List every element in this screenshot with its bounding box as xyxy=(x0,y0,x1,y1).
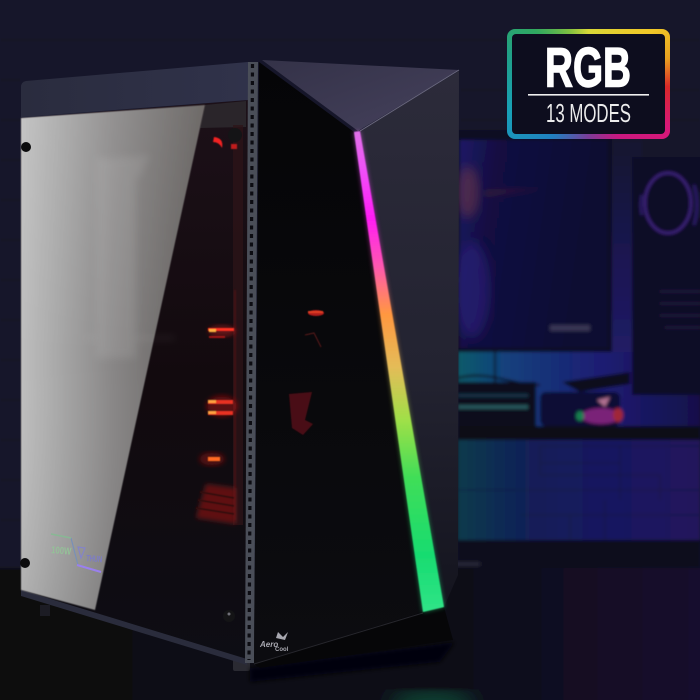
base wedge xyxy=(254,607,453,668)
perforated rack strip xyxy=(245,62,258,663)
badge inner panel xyxy=(512,34,665,134)
side panel interior xyxy=(21,100,248,663)
front glass panel xyxy=(254,62,423,664)
case logo on glass: THUN xyxy=(86,553,103,564)
roof triangle xyxy=(262,60,459,131)
badge text xyxy=(528,36,649,128)
keyboard xyxy=(458,382,536,426)
right dark panel with ring xyxy=(632,157,700,395)
floor xyxy=(0,568,700,700)
glass screws xyxy=(20,128,242,622)
case base shadow xyxy=(250,642,455,682)
LED light bar xyxy=(354,131,444,612)
red glow lights xyxy=(196,137,238,524)
faint components behind glass xyxy=(85,155,175,358)
inner red edge xyxy=(233,125,243,525)
LED bar glow xyxy=(354,131,444,612)
front panel reflections xyxy=(289,310,324,435)
brand logo: Aero xyxy=(259,640,278,649)
mirrored glass panel xyxy=(21,105,205,610)
mouse with RGB xyxy=(540,392,623,426)
case logo on glass xyxy=(51,534,103,572)
monitor screen xyxy=(454,140,608,348)
badge text: RGB xyxy=(545,36,631,98)
case logo on glass: 100W xyxy=(51,545,72,558)
case xyxy=(20,60,459,682)
lower brick band xyxy=(458,440,700,542)
right side panel xyxy=(360,71,459,607)
bottom side frame xyxy=(21,590,247,665)
badge: RGB 13 modes xyxy=(507,29,670,139)
case feet xyxy=(40,605,250,671)
brand logo: Cool xyxy=(275,647,289,653)
interior top shade xyxy=(200,101,246,128)
brand logo xyxy=(259,632,289,653)
top side frame xyxy=(21,62,248,117)
